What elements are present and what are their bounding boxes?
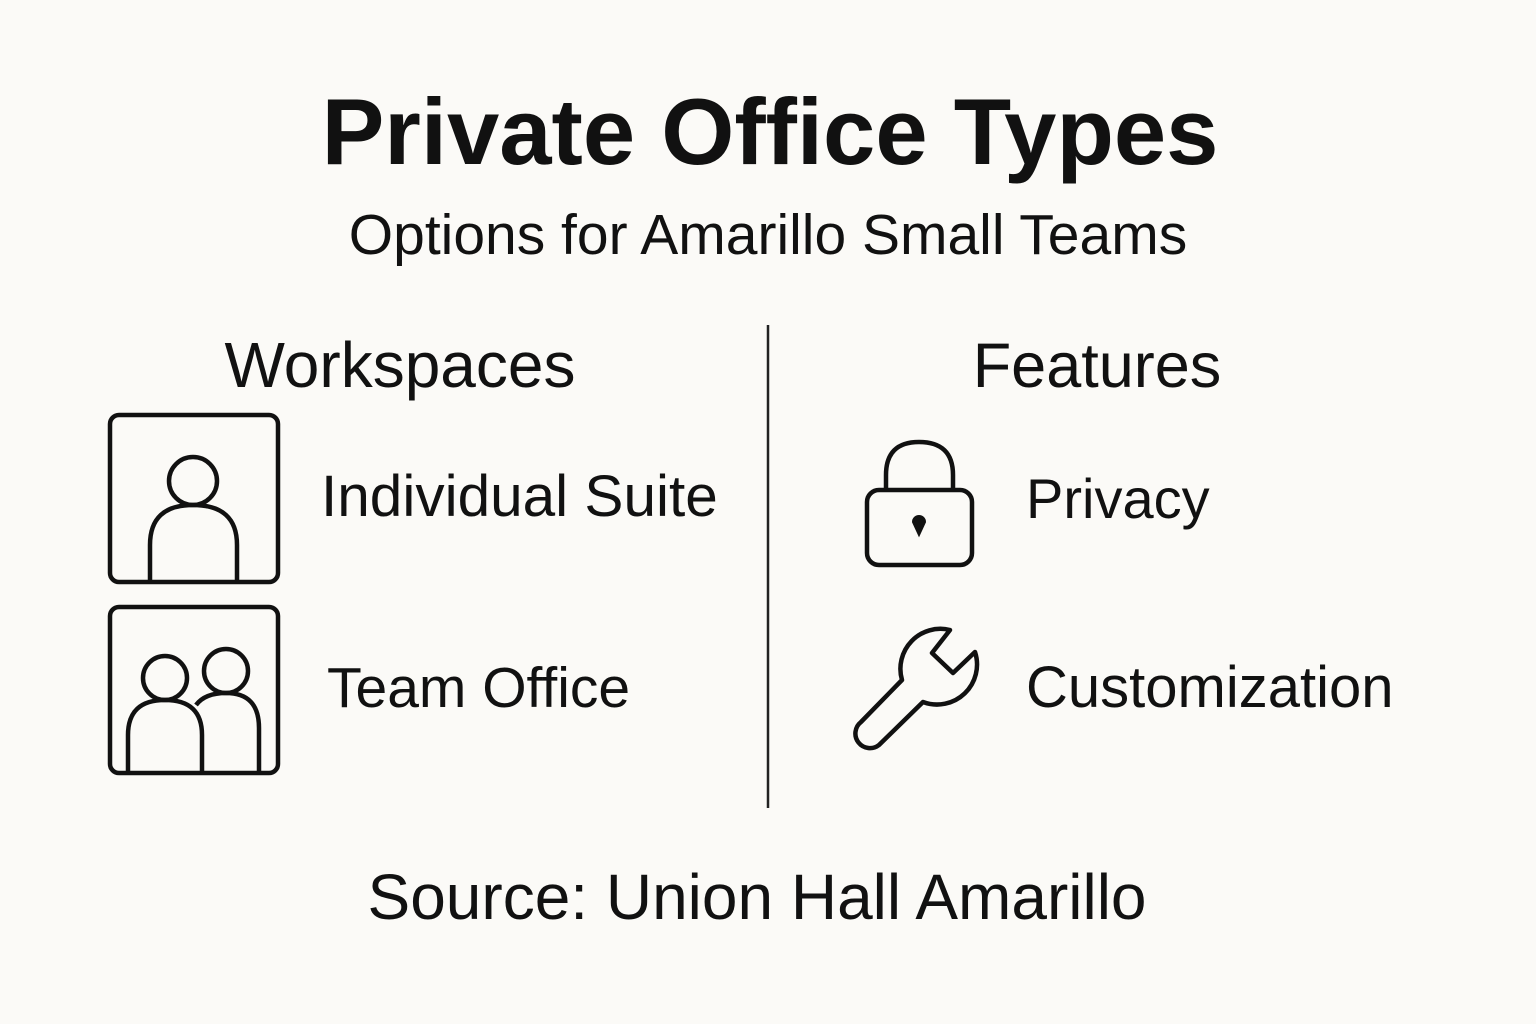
- heading: features: Features: [973, 331, 1221, 401]
- title: Private Office Types: [322, 79, 1218, 184]
- icon: wrench: [855, 629, 977, 748]
- label: team office: Team Office: [327, 656, 630, 720]
- label: customization: Customization: [1026, 655, 1393, 720]
- source: Source: Union Hall Amarillo: [368, 861, 1146, 933]
- icon: lock: [867, 442, 972, 565]
- icon: individual person: [110, 415, 278, 582]
- label: privacy: Privacy: [1026, 467, 1210, 530]
- heading: workspaces: Workspaces: [225, 329, 575, 401]
- subtitle: Options for Amarillo Small Teams: [349, 203, 1187, 267]
- icon: team: [110, 607, 278, 773]
- label: individual suite: Individual Suite: [321, 464, 718, 529]
